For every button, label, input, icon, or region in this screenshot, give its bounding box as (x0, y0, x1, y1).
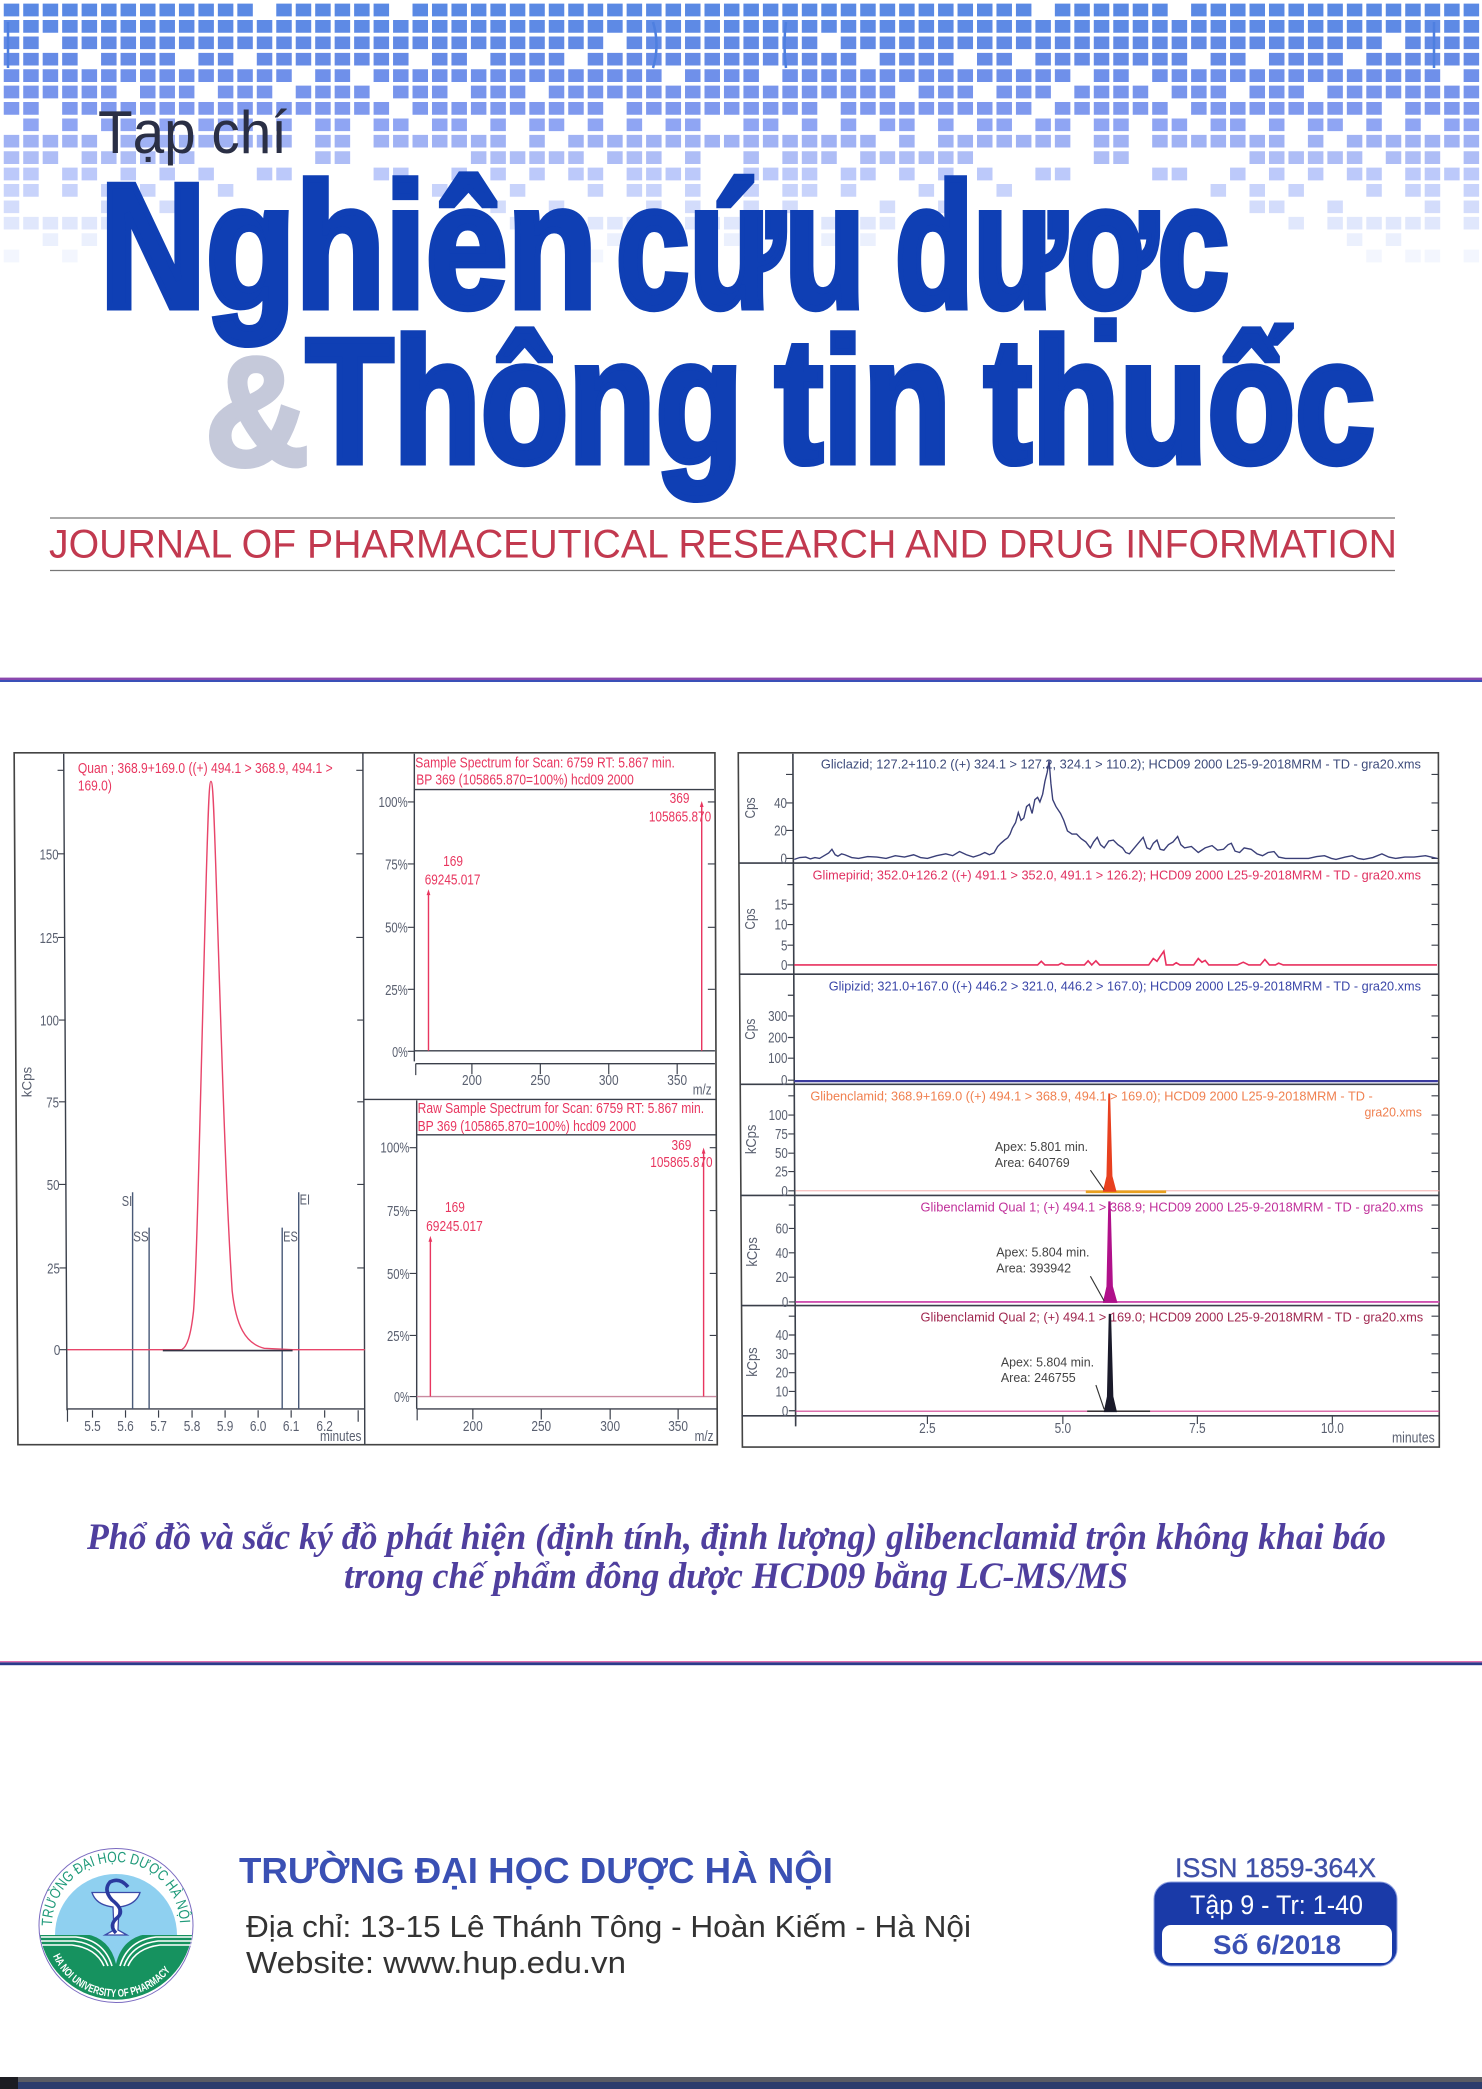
spectrum: sample: 50% (385, 920, 408, 936)
panel: MRM chromatograms (738, 753, 1439, 1447)
chromatogram: Quan: 25 (47, 1261, 60, 1277)
trace: Gliclazid (794, 756, 1437, 859)
website: Website: www.hup.edu.vn (246, 1945, 626, 1980)
header: registration marks on the grid (8, 22, 1434, 68)
chromatogram: Quan: SI (122, 1193, 132, 1210)
chromatogram: Quan: minutes (320, 1428, 362, 1445)
spectrum: sample: BP 369 (105865.870=100%) hcd09 2000 (416, 772, 634, 788)
axis labels: 5 (781, 937, 787, 954)
issue box: Số 6/2018 (1213, 1930, 1341, 1960)
axis labels: 5.0 (1055, 1420, 1071, 1437)
issue box (1154, 1853, 1397, 1966)
label: Tạp chí: Tạp chí (98, 99, 287, 166)
axis labels: kCps (744, 1237, 761, 1267)
spectrum: raw sample: 25% (387, 1328, 410, 1345)
trace: Glibenclamid Qual 2: Area: 246755 (1001, 1370, 1076, 1385)
caption: trong chế phẩm đông dược HCD09 bằng LC-MS/MS (344, 1556, 1128, 1597)
header: pixel grid pattern (4, 10, 1482, 256)
logo: bowl of Hygieia (92, 1892, 140, 1935)
chromatogram: Quan: ES (283, 1229, 298, 1245)
title line 2: Thông tin thuốc: thuốc (984, 302, 1375, 500)
axis labels: 0 (782, 1403, 788, 1420)
axis labels: 2.5 (919, 1420, 936, 1437)
axis labels: 60 (775, 1221, 788, 1238)
chromatogram: Quan (19, 753, 365, 1445)
axis labels: minutes (1392, 1429, 1435, 1446)
chromatogram: Quan: 5.6 (117, 1418, 134, 1435)
chromatogram: Quan: SS (133, 1229, 149, 1245)
chromatogram: Quan: Quan ; 368.9+169.0 ((+) 494.1 > 368.9, 494.1 > (78, 760, 333, 777)
title line 2: Thông tin thuốc (306, 302, 1375, 500)
spectrum: sample: 250 (530, 1072, 550, 1089)
trace: Glibenclamid quan (796, 1088, 1439, 1192)
spectrum: raw sample: 0% (394, 1389, 410, 1406)
spectrum: raw sample: m/z (695, 1428, 714, 1445)
chromatogram: Quan: 5.7 (150, 1418, 167, 1435)
trace: Gliclazid: Gliclazid; 127.2+110.2 ((+) 324.1 > 127.2, 324.1 > 110.2); HCD09 2000 L25-9-2018MRM - TD - gra20.xms (821, 756, 1421, 771)
trace: Glibenclamid Qual 2: Apex: 5.804 min. (1001, 1355, 1094, 1370)
trace: Glipizid: Glipizid; 321.0+167.0 ((+) 446.2 > 321.0, 446.2 > 167.0); HCD09 2000 L25-9-2018MRM - TD - gra20.xms (829, 979, 1421, 994)
trace: Glibenclamid quan: Glibenclamid; 368.9+169.0 ((+) 494.1 > 368.9, 494.1 > 169.0); HCD09 2000 L25-9-2018MRM - TD - (810, 1088, 1373, 1103)
spectrum: sample: 100% (378, 794, 408, 811)
ISSN: ISSN 1859-364X (1175, 1853, 1376, 1883)
axis labels: kCps (743, 1124, 760, 1154)
title line 2: Thông tin thuốc: tin (775, 302, 951, 500)
trace: Glibenclamid Qual 1: Apex: 5.804 min. (996, 1244, 1089, 1259)
spectrum: sample: m/z (693, 1082, 712, 1098)
axis labels: 20 (774, 822, 787, 839)
trace: Glibenclamid quan: gra20.xms (1364, 1104, 1422, 1119)
chromatogram: Quan: 5.5 (84, 1418, 101, 1435)
English journal title with rules: JOURNAL OF PHARMACEUTICAL RESEARCH AND DRUG INFORMATION (49, 522, 1397, 566)
title line 1: Nghiên cứu dược: cứu (616, 147, 865, 345)
spectrum: raw sample: 369 (672, 1137, 691, 1154)
title line 1: Nghiên cứu dược: dược (895, 147, 1229, 345)
top divider (0, 678, 1482, 682)
spectrum: raw sample: 350 (668, 1418, 688, 1435)
issue box: Tập 9 - Tr: 1-40 (1190, 1890, 1363, 1920)
chromatogram: Quan: 50 (47, 1177, 59, 1194)
axis labels: 10.0 (1321, 1420, 1344, 1437)
title block (98, 99, 1375, 500)
spectrum: sample (363, 754, 716, 1099)
chromatogram: Quan: 100 (40, 1013, 59, 1030)
axis labels: 300 (768, 1008, 787, 1025)
issue number (1162, 1925, 1392, 1963)
caption: Phổ đồ và sắc ký đồ phát hiện (định tính, định lượng) glibenclamid trộn không khai báo (86, 1517, 1386, 1558)
axis labels: Cps (742, 1018, 759, 1040)
axis labels: 20 (775, 1269, 788, 1286)
chromatogram: Quan: 6.0 (250, 1418, 266, 1435)
chromatogram: Quan: 5.8 (184, 1418, 200, 1435)
volume badge (1154, 1882, 1397, 1966)
chromatogram: Quan: 150 (40, 847, 59, 863)
spectrum: sample: 350 (667, 1072, 687, 1089)
bottom divider (0, 1661, 1482, 1665)
spectrum: sample: 169 (443, 853, 463, 870)
spectrum: sample: 200 (462, 1072, 482, 1089)
trace: Glibenclamid Qual 2: Glibenclamid Qual 2; (+) 494.1 > 169.0; HCD09 2000 L25-9-2018MRM - TD - gra20.xms (921, 1310, 1424, 1325)
spectrum: sample: 0% (392, 1044, 408, 1061)
axis labels: 0 (781, 850, 787, 867)
axis labels: 0 (782, 1294, 788, 1311)
chromatogram: Quan: 169.0) (78, 778, 112, 794)
axis labels: 10 (775, 917, 787, 934)
trace: Glibenclamid quan: Area: 640769 (995, 1155, 1070, 1170)
title line 2: Thông tin thuốc: Thông (306, 302, 743, 500)
trace: Glimepirid (794, 868, 1437, 965)
axis labels: 100 (769, 1107, 788, 1124)
spectrum: raw sample: 50% (387, 1266, 410, 1283)
chromatogram: Quan: 75 (46, 1094, 59, 1111)
spectrum: raw sample: 69245.017 (426, 1218, 483, 1235)
axis labels: 75 (775, 1126, 788, 1143)
spectrum: raw sample: 105865.870 (650, 1154, 713, 1171)
address: Địa chỉ: 13-15 Lê Thánh Tông - Hoàn Kiếm - Hà Nội (246, 1909, 971, 1944)
spectrum: raw sample (380, 1100, 717, 1445)
logo: green base (40, 1935, 192, 2000)
chromatogram: Quan: 6.1 (283, 1418, 299, 1435)
chromatogram: Quan: kCps (19, 1067, 35, 1097)
spectrum: sample: Sample Spectrum for Scan: 6759 RT: 5.867 min. (415, 755, 675, 771)
logo: blue medallion (55, 1874, 177, 1935)
logo: Hanoi University of Pharmacy: HA NOI UNIVERSITY OF PHARMACY (53, 1953, 170, 1997)
axis labels: 40 (775, 1327, 788, 1344)
panel: quantitation chromatogram and spectra (14, 753, 717, 1445)
caption (86, 1517, 1386, 1597)
logo: arc text (52, 1862, 180, 1926)
logo: open book (41, 1934, 192, 1966)
trace: Glibenclamid quan: Apex: 5.801 min. (995, 1139, 1088, 1154)
axis labels: 30 (775, 1346, 788, 1363)
chromatogram: Quan: 125 (40, 930, 59, 947)
spectrum: raw sample: 100% (380, 1140, 410, 1157)
chromatogram: Quan: EI (300, 1192, 310, 1209)
axis labels: Cps (742, 908, 759, 930)
axis labels: 7.5 (1189, 1420, 1206, 1437)
spectrum: sample: 69245.017 (425, 872, 480, 889)
spectrum: raw sample: 200 (463, 1418, 483, 1435)
logo: snake (107, 1880, 128, 1933)
trace: Glibenclamid Qual 1: Glibenclamid Qual 1; (+) 494.1 > 368.9; HCD09 2000 L25-9-2018MRM - TD - gra20.xms (921, 1199, 1424, 1214)
axis labels: 0 (781, 1072, 787, 1089)
spectrum: sample: 75% (385, 857, 408, 873)
axis labels: 0 (781, 1183, 788, 1200)
logo: Hanoi University of Pharmacy (38, 1848, 194, 2003)
axis labels: 25 (775, 1164, 788, 1181)
chromatogram: Quan: 6.2 (316, 1418, 333, 1435)
spectrum: raw sample: 300 (600, 1418, 620, 1435)
bottom band (0, 2077, 1482, 2089)
title line 1: Nghiên cứu dược: Nghiên (100, 147, 597, 345)
ampersand: & (205, 325, 309, 498)
axis labels: 40 (775, 1245, 788, 1262)
axis labels: 40 (774, 795, 787, 812)
axis labels (742, 795, 1435, 1446)
university name: TRƯỜNG ĐẠI HỌC DƯỢC HÀ NỘI (239, 1849, 833, 1891)
spectrum: raw sample: Raw Sample Spectrum for Scan: 6759 RT: 5.867 min. (418, 1100, 704, 1117)
spectrum: raw sample: 169 (445, 1199, 465, 1216)
frame and axes (738, 753, 1439, 1447)
axis labels: 100 (768, 1050, 787, 1067)
axis labels: 10 (775, 1384, 788, 1401)
axis labels: 0 (781, 957, 787, 974)
axis labels: 200 (768, 1030, 787, 1047)
title line 1: Nghiên cứu dược (100, 147, 1229, 345)
spectrum: sample: 105865.870 (649, 808, 711, 825)
spectrum: sample: 300 (599, 1072, 619, 1089)
spectrum: raw sample: 250 (531, 1418, 551, 1435)
trace: Glibenclamid Qual 1 (796, 1199, 1439, 1303)
spectrum: raw sample: 75% (387, 1203, 410, 1220)
chromatogram: Quan: 5.9 (217, 1418, 233, 1435)
spectrum: sample: 369 (670, 790, 689, 807)
axis labels: 15 (775, 896, 787, 913)
trace: Glimepirid: Glimepirid; 352.0+126.2 ((+) 491.1 > 352.0, 491.1 > 126.2); HCD09 2000 L25-9-2018MRM - TD - gra20.xms (813, 868, 1421, 883)
axis labels: Cps (742, 797, 759, 819)
outer frame (14, 753, 717, 1445)
axis labels: 50 (775, 1145, 788, 1162)
chromatogram: Quan: 0 (54, 1342, 60, 1359)
trace: Glibenclamid Qual 2 (796, 1310, 1439, 1412)
axis labels: 20 (775, 1365, 788, 1382)
spectrum: sample: 25% (385, 982, 408, 999)
spectrum: raw sample: BP 369 (105865.870=100%) hcd09 2000 (418, 1118, 636, 1135)
logo: Hanoi University of Pharmacy: TRƯỜNG ĐẠI HỌC DƯỢC HÀ NỘI (42, 1852, 192, 1926)
trace: Glibenclamid Qual 1: Area: 393942 (996, 1261, 1071, 1276)
axis labels: kCps (744, 1347, 761, 1377)
publisher block (239, 1849, 971, 1980)
